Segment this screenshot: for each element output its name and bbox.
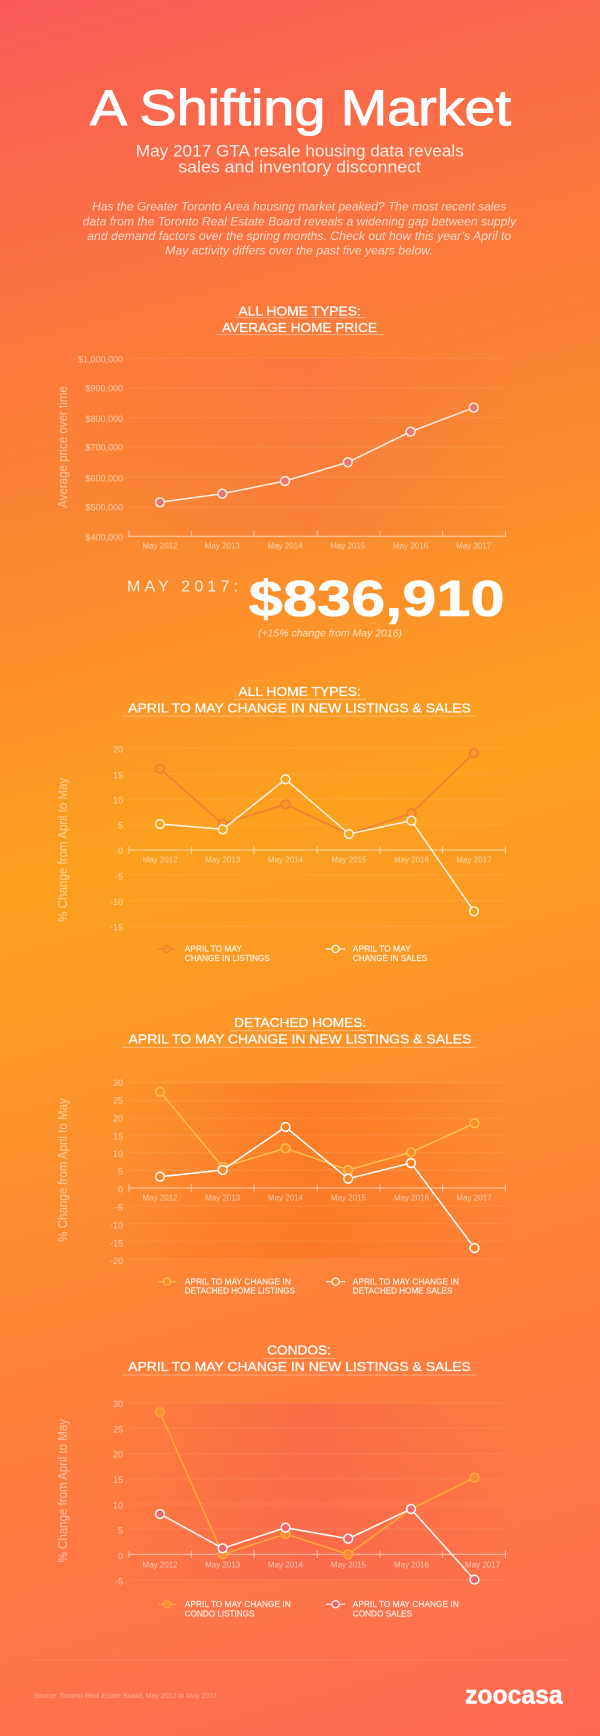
x axis xyxy=(129,531,506,536)
x axis labels: May 2012 xyxy=(142,1560,178,1569)
legend xyxy=(158,1276,459,1296)
y axis title: % Change from April to May xyxy=(56,777,70,922)
y axis labels: 30 xyxy=(113,1078,123,1088)
y axis labels: -15 xyxy=(110,1238,123,1248)
callout: May 2017 price xyxy=(127,570,505,640)
logo: zoocasa: zoocasa xyxy=(465,1680,563,1710)
y axis labels: 5 xyxy=(118,821,123,831)
heading: all home types change: APRIL TO MAY CHANGE IN NEW LISTINGS & SALES xyxy=(128,701,471,716)
y axis labels: 5 xyxy=(118,1526,123,1536)
intro text block: and demand factors over the spring months. Check out how this year’s April to xyxy=(87,229,512,243)
intro text block: Has the Greater Toronto Area housing market peaked? The most recent sales xyxy=(92,200,506,214)
y axis labels: -10 xyxy=(110,897,123,907)
legend xyxy=(158,944,428,963)
y axis labels: -5 xyxy=(115,1202,123,1212)
x axis labels: May 2013 xyxy=(205,542,240,551)
x axis labels: May 2012 xyxy=(142,1194,178,1203)
panel: detached homes xyxy=(56,1015,510,1296)
y axis labels: $700,000 xyxy=(85,443,123,453)
y axis labels: 20 xyxy=(113,1450,123,1460)
y axis labels: 20 xyxy=(113,745,123,755)
x axis labels: May 2013 xyxy=(205,1194,241,1203)
intro text block: data from the Toronto Real Estate Board reveals a widening gap between supply xyxy=(83,214,517,228)
intro text block: May activity differs over the past five years below. xyxy=(165,244,433,258)
intro text block xyxy=(83,200,517,258)
panel: condos xyxy=(56,1342,510,1618)
x axis labels: May 2015 xyxy=(331,1194,367,1203)
x axis labels: May 2014 xyxy=(267,542,303,551)
x axis labels: May 2015 xyxy=(331,1560,367,1569)
x axis labels: May 2017 xyxy=(456,542,492,551)
y axis labels: $400,000 xyxy=(85,533,123,543)
title: A Shifting Market xyxy=(90,80,511,136)
legend: DETACHED HOME SALES xyxy=(353,1286,453,1296)
x axis labels: May 2013 xyxy=(205,856,241,865)
y axis labels: 0 xyxy=(118,846,123,856)
legend: CONDO LISTINGS xyxy=(185,1608,255,1618)
x axis labels: May 2017 xyxy=(456,1194,492,1203)
legend: DETACHED HOME LISTINGS xyxy=(185,1286,295,1296)
y axis labels: 5 xyxy=(118,1167,123,1177)
x axis labels: May 2014 xyxy=(268,1194,304,1203)
y axis labels: 20 xyxy=(113,1114,123,1124)
x axis labels: May 2014 xyxy=(268,856,304,865)
x axis labels: May 2015 xyxy=(331,856,367,865)
y axis labels xyxy=(110,1078,123,1266)
y axis labels: $500,000 xyxy=(85,502,123,512)
line series: condo listings xyxy=(156,1408,479,1559)
y axis labels xyxy=(78,355,123,543)
x axis labels: May 2016 xyxy=(394,1194,430,1203)
y axis labels: 25 xyxy=(113,1424,123,1434)
y axis labels: $1,000,000 xyxy=(78,355,123,365)
heading: all home types change: ALL HOME TYPES: xyxy=(238,684,361,699)
x axis labels: May 2014 xyxy=(268,1560,304,1569)
y axis title: Average price over time xyxy=(56,386,70,508)
heading: average home price xyxy=(215,303,384,335)
legend: APRIL TO MAY CHANGE IN xyxy=(353,1599,459,1609)
heading: detached homes: DETACHED HOMES: xyxy=(234,1015,366,1030)
y axis labels: -5 xyxy=(115,872,123,882)
heading: all home types change xyxy=(122,684,477,716)
heading: detached homes xyxy=(122,1015,477,1047)
legend: APRIL TO MAY CHANGE IN xyxy=(185,1599,291,1609)
x axis labels: May 2013 xyxy=(205,1560,241,1569)
x axis xyxy=(129,1550,506,1558)
x axis labels: May 2012 xyxy=(142,542,178,551)
x axis labels xyxy=(142,542,492,551)
y axis labels: 10 xyxy=(113,795,123,805)
x axis labels: May 2016 xyxy=(394,1560,430,1569)
y axis labels: 10 xyxy=(113,1149,123,1159)
x axis labels: May 2016 xyxy=(393,542,429,551)
subtitle xyxy=(136,143,464,177)
y axis labels: -10 xyxy=(110,1220,123,1230)
legend xyxy=(158,1599,459,1618)
x axis labels: May 2015 xyxy=(330,542,366,551)
line series: detached listings xyxy=(156,1087,479,1174)
x axis labels xyxy=(142,856,492,865)
x axis xyxy=(129,846,506,854)
y axis labels: 0 xyxy=(118,1184,123,1194)
legend: APRIL TO MAY CHANGE IN xyxy=(353,1276,459,1286)
y axis labels: $600,000 xyxy=(85,473,123,483)
legend: CHANGE IN SALES xyxy=(353,953,428,963)
heading: average home price: AVERAGE HOME PRICE xyxy=(222,320,377,335)
y axis labels: -20 xyxy=(110,1256,123,1266)
y axis labels: $900,000 xyxy=(85,383,123,393)
x axis labels: May 2016 xyxy=(394,856,430,865)
y axis labels: 0 xyxy=(118,1551,123,1561)
line series: condo sales xyxy=(156,1505,479,1584)
legend: APRIL TO MAY xyxy=(185,944,242,954)
y axis labels xyxy=(110,745,123,933)
legend: APRIL TO MAY CHANGE IN xyxy=(185,1276,291,1286)
panel: all home types change xyxy=(56,684,506,963)
y axis labels: 15 xyxy=(113,770,123,780)
x axis xyxy=(129,1184,506,1192)
source note: Source: Toronto Real Estate Board, May 2012 to May 2017. xyxy=(34,1693,219,1700)
heading: average home price: ALL HOME TYPES: xyxy=(238,303,361,318)
subtitle: May 2017 GTA resale housing data reveals xyxy=(136,143,464,161)
line series: average price xyxy=(156,403,478,507)
x axis labels: May 2017 xyxy=(465,1560,501,1569)
panel: average home price xyxy=(56,303,510,551)
callout: May 2017 price: (+15% change from May 2016) xyxy=(258,628,402,640)
y axis labels: 25 xyxy=(113,1096,123,1106)
callout: May 2017 price: $836,910 xyxy=(249,570,505,627)
y axis labels xyxy=(113,1399,123,1587)
heading: condos: CONDOS: xyxy=(267,1342,331,1357)
x axis labels: May 2012 xyxy=(142,856,178,865)
subtitle: sales and inventory disconnect xyxy=(178,159,422,177)
heading: condos xyxy=(122,1342,477,1375)
y axis labels: 15 xyxy=(113,1131,123,1141)
y axis title: % Change from April to May xyxy=(56,1098,70,1242)
y axis labels: $800,000 xyxy=(85,414,123,424)
callout: May 2017 price: MAY 2017: xyxy=(127,579,238,596)
y axis labels: 10 xyxy=(113,1500,123,1510)
line series: listings xyxy=(156,749,478,838)
y axis labels: 15 xyxy=(113,1475,123,1485)
x axis labels xyxy=(142,1194,492,1203)
y axis labels: -5 xyxy=(115,1577,123,1587)
line series: detached sales xyxy=(156,1123,479,1252)
heading: condos: APRIL TO MAY CHANGE IN NEW LISTINGS & SALES xyxy=(128,1359,471,1374)
line series: sales xyxy=(156,775,478,916)
y axis title: % Change from April to May xyxy=(56,1418,70,1562)
heading: detached homes: APRIL TO MAY CHANGE IN NEW LISTINGS & SALES xyxy=(129,1032,472,1047)
legend: CONDO SALES xyxy=(353,1608,412,1618)
x axis labels xyxy=(142,1560,501,1569)
y axis labels: -15 xyxy=(110,923,123,933)
legend: APRIL TO MAY xyxy=(353,944,411,954)
x axis labels: May 2017 xyxy=(456,856,492,865)
y axis labels: 30 xyxy=(113,1399,123,1409)
legend: CHANGE IN LISTINGS xyxy=(185,953,270,963)
